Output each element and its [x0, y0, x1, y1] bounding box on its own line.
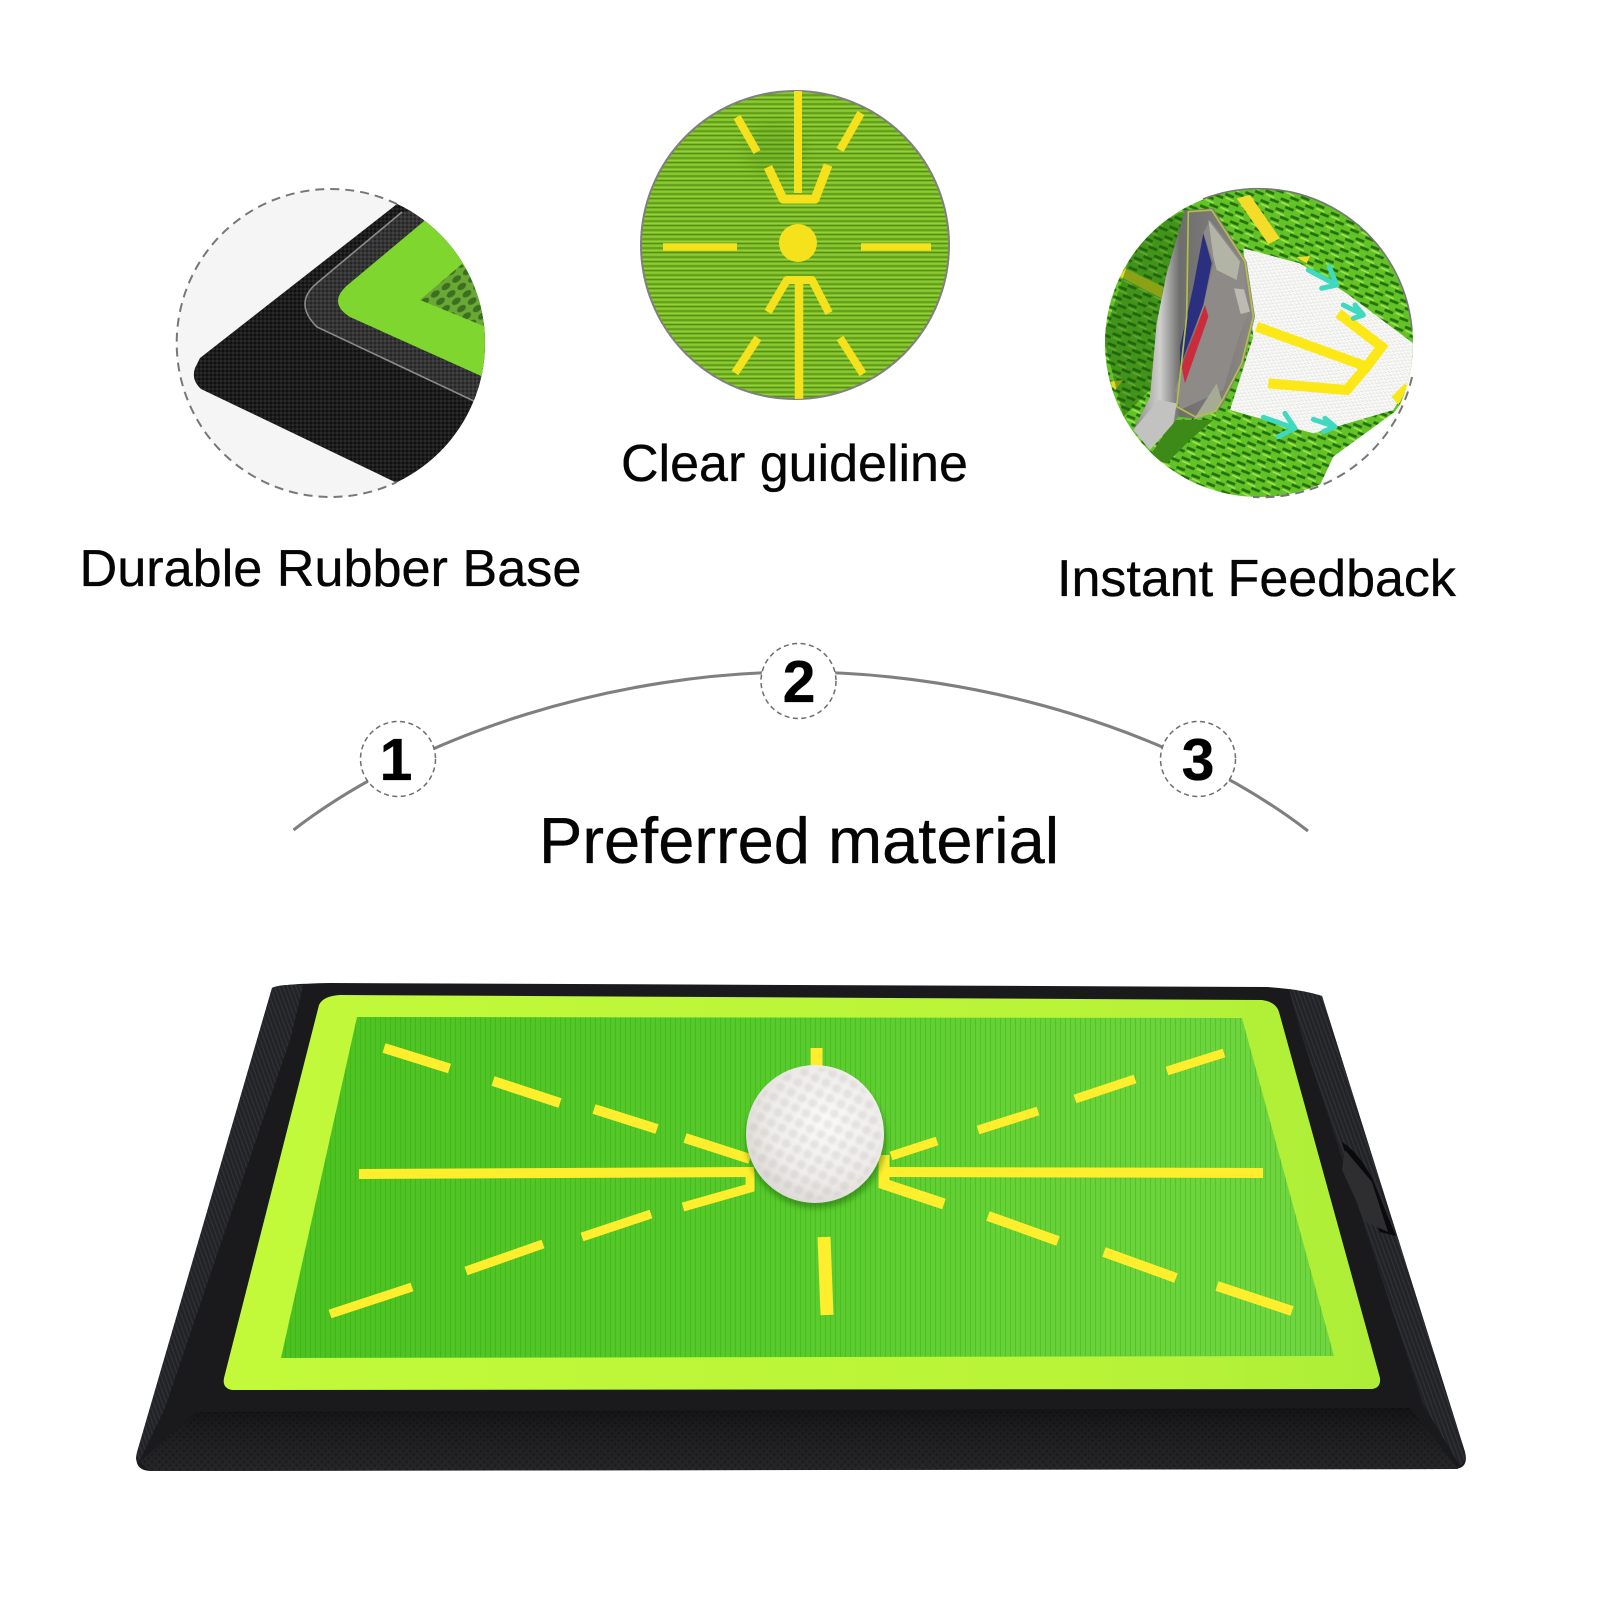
- arc with numbered markers: [294, 644, 1308, 831]
- left bevel: [136, 985, 303, 1461]
- marker 3: 3: [1182, 727, 1214, 793]
- lime rim: [224, 995, 1380, 1390]
- front face: [140, 1408, 1458, 1471]
- caption: instant feedback: Instant Feedback: [1057, 550, 1457, 608]
- green hitting surface: [281, 1017, 1334, 1358]
- marker 1: [360, 722, 436, 796]
- marker 2: [761, 644, 836, 718]
- caption: durable rubber base: Durable Rubber Base: [80, 540, 581, 598]
- golf ball shadow: [746, 1072, 886, 1208]
- arc line: [294, 672, 1308, 831]
- heading: preferred material: Preferred material: [539, 804, 1059, 877]
- marker 1: 1: [380, 727, 412, 793]
- golf ball: [746, 1065, 884, 1203]
- golf mat product: [136, 983, 1466, 1471]
- circle panel: durable rubber base: [176, 188, 485, 498]
- mat rubber body: [137, 983, 1466, 1471]
- right bevel: [1289, 989, 1465, 1466]
- surface grain: [281, 1017, 1334, 1358]
- yellow feedback lines: [330, 1048, 1292, 1315]
- front face texture: [140, 1408, 1458, 1471]
- marker 2: 2: [783, 649, 815, 715]
- handle slot: [1342, 1142, 1396, 1236]
- circle panel: clear guideline: [641, 88, 949, 402]
- caption: clear guideline: Clear guideline: [621, 435, 968, 493]
- circle panel: instant feedback: [1100, 185, 1430, 507]
- marker 3: [1160, 722, 1236, 796]
